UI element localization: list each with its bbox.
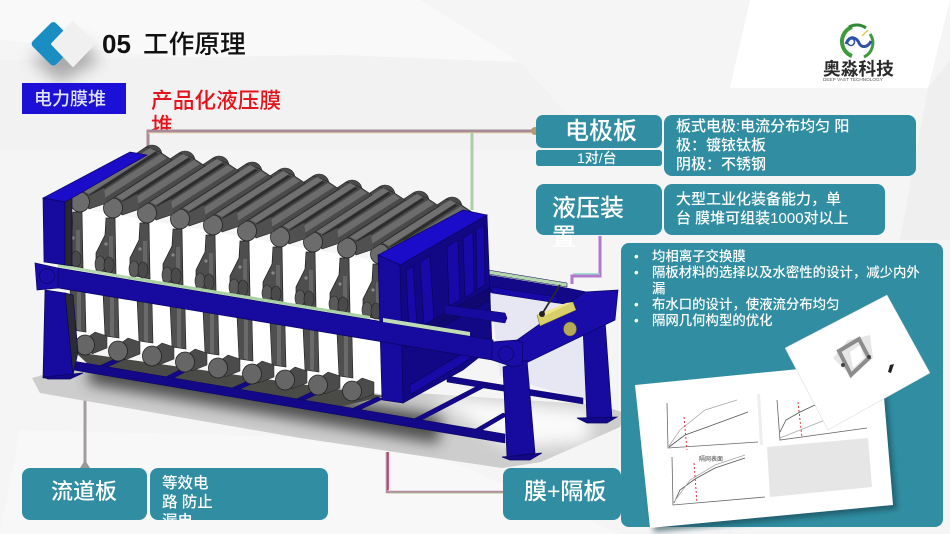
icon: header chevron (30, 21, 100, 82)
title: 工作原理 (143, 30, 246, 59)
bullet list: 隔板材料的选择以及水密性的设计，减少内外 (652, 264, 920, 280)
sheet: spacer diagram (785, 295, 930, 430)
bullet list (634, 248, 920, 328)
rear beam (488, 270, 587, 305)
panel: electrode plate description: 阴极：不锈钢 (676, 156, 766, 173)
bullet list: 隔网几何构型的优化 (652, 313, 773, 328)
panel: membrane and spacer details (621, 243, 943, 532)
sheet: performance charts (635, 361, 897, 532)
panel: electrode plate quantity (536, 150, 662, 166)
tag: 电力膜堆 (22, 83, 126, 114)
tag: 电力膜堆: 电力膜堆 (34, 89, 106, 109)
connector: hydraulic device line (572, 236, 600, 284)
panel: hydraulic device title: 置 (552, 224, 576, 251)
panel: hydraulic device description (664, 184, 885, 235)
heading: product callout: 产品化液压膜 (151, 88, 281, 113)
bullet list: 漏 (652, 281, 665, 296)
bullet list: • (634, 297, 639, 312)
connector: flow plate line (80, 395, 90, 468)
panel: membrane and spacer title: 膜+隔板 (524, 478, 606, 504)
upper plate bars (70, 145, 472, 264)
title: 05 (102, 29, 131, 59)
panel: flow plate title (22, 468, 147, 520)
heading: product callout (152, 90, 280, 130)
bullet list: • (634, 265, 639, 280)
panel: electrode plate title (536, 115, 662, 148)
front beam (58, 264, 493, 360)
upper hanger arms (62, 212, 383, 320)
bullet list: 均相离子交换膜 (652, 248, 746, 264)
machine interior background (68, 206, 585, 408)
panel: membrane and spacer title (503, 468, 621, 520)
heading: product callout: 堆 (151, 113, 173, 138)
hydraulic cylinder rod (445, 305, 507, 323)
title (102, 29, 246, 59)
lower arms and rollers (70, 287, 374, 401)
panel: electrode plate description (664, 115, 916, 176)
hydraulic press block (378, 210, 492, 403)
bullet list: • (634, 249, 639, 264)
connector: top line to electrode plate (148, 127, 539, 210)
panel: flow plate description: 等效电 (162, 474, 209, 492)
panel: electrode plate description: 极：镀铱钛板 (676, 137, 766, 154)
bullet list: 布水口的设计，使液流分布均匀 (652, 296, 839, 312)
panel: flow plate title: 流道板 (51, 479, 117, 504)
logo: 奥淼科技 (823, 58, 894, 79)
panel: hydraulic device description: 大型工业化装备能力，单 (676, 191, 841, 208)
logo (823, 25, 894, 82)
panel: hydraulic device description: 台 膜堆可组装1000对以上 (676, 209, 849, 227)
lower frame rails (73, 352, 583, 443)
panel: flow plate description: 路 防止 (162, 493, 213, 511)
panel: electrode plate title: 电极板 (565, 118, 637, 145)
panel: flow plate description (150, 468, 328, 520)
valve lever and yellow box (537, 285, 576, 336)
panel: hydraulic device title (536, 184, 662, 251)
machine: membrane stack assembly (32, 145, 625, 468)
panel: electrode plate quantity: 1对/台 (577, 150, 617, 166)
machine floor and shadow (32, 370, 625, 468)
sheet: performance charts: 隔网表面 (699, 455, 723, 463)
panel: flow plate description: 漏电 (162, 512, 193, 530)
right side frame (492, 290, 618, 460)
logo mark (842, 25, 873, 57)
panel: electrode plate description: 板式电极:电流分布均匀 阳 (676, 118, 849, 135)
logo: DEEP VAST TECHNOLOGY (823, 77, 884, 82)
panel: hydraulic device title: 液压装 (552, 195, 624, 222)
bullet list: • (634, 313, 639, 328)
connector: membrane line (387, 452, 503, 493)
left post (35, 152, 147, 379)
